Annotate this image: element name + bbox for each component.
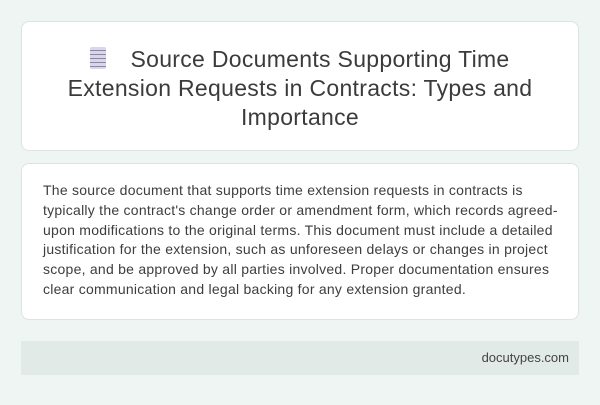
panel: title card [21, 21, 579, 151]
text block [42, 182, 558, 297]
title: Source Documents Supporting Time [130, 46, 510, 72]
title: Importance [241, 104, 359, 130]
text block: scope, and be approved by all parties involved. Proper documentation ensures [43, 261, 549, 277]
icon: document [90, 47, 106, 69]
title: Extension Requests in Contracts: Types and [68, 75, 532, 101]
title [68, 46, 532, 130]
footer text: docutypes.com [482, 350, 569, 365]
text block: justification for the extension, such as unforeseen delays or changes in project [43, 241, 548, 257]
text block: The source document that supports time extension requests in contracts is [43, 182, 523, 198]
text block: upon modifications to the original terms. This document must include a detailed [43, 222, 553, 238]
text block: clear communication and legal backing for any extension granted. [43, 281, 466, 297]
panel: description [21, 163, 579, 320]
footer [21, 341, 579, 375]
text block: typically the contract's change order or amendment form, which records agreed- [43, 202, 558, 218]
